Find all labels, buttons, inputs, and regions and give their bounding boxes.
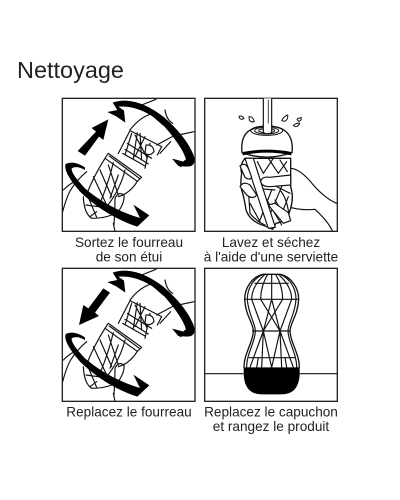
caption: à l'aide d'une serviette <box>204 250 338 264</box>
illustration: replacing the sleeve with twist arrows <box>62 268 195 401</box>
panel: lavez et séchez <box>204 98 338 264</box>
head dome <box>242 126 292 157</box>
illustration: removing the sleeve with twist arrows <box>62 98 195 231</box>
black cap <box>244 367 300 394</box>
caption: Replacez le fourreau <box>66 404 192 420</box>
water drops <box>239 115 301 127</box>
panel: sortez le fourreau <box>62 98 195 264</box>
title: Nettoyage <box>17 57 124 83</box>
lattice body <box>244 274 299 367</box>
towel strip <box>245 158 275 228</box>
panel: replacez le capuchon <box>204 268 338 434</box>
panel: replacez le fourreau <box>62 268 195 420</box>
caption: Lavez et séchez <box>222 235 320 250</box>
lower lattice body <box>241 158 292 229</box>
hand behind <box>288 168 337 231</box>
ground line <box>205 372 337 375</box>
thumb <box>261 175 291 187</box>
caption: Sortez le fourreau <box>75 235 183 250</box>
caption: et rangez le produit <box>213 419 329 434</box>
caption: Replacez le capuchon <box>204 404 338 420</box>
caption: de son étui <box>96 250 162 264</box>
illustration: washing under the tap and drying <box>205 98 337 231</box>
tap water stream <box>263 98 272 134</box>
illustration: capped product standing upright <box>205 268 337 401</box>
